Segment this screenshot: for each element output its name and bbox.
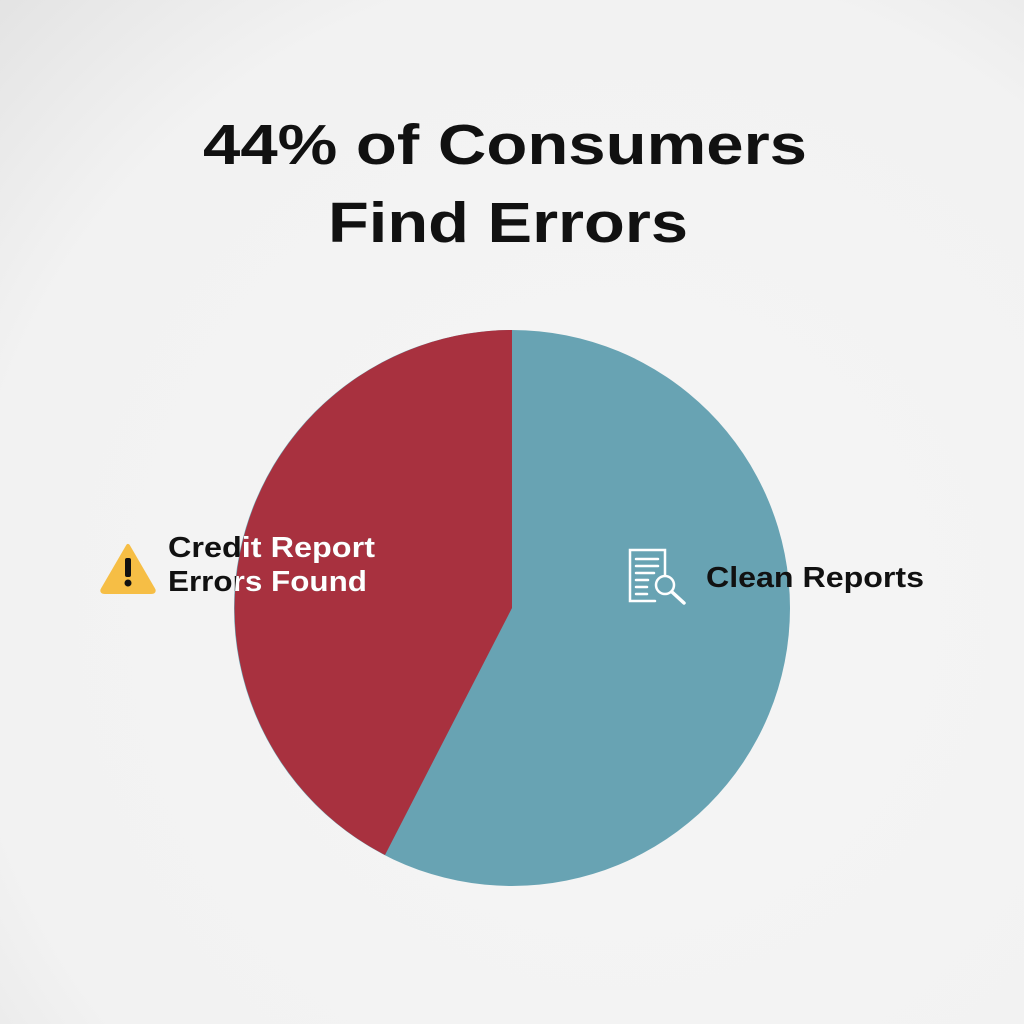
icon: warning — [102, 546, 154, 592]
title: 44% of Consumers — [203, 113, 807, 177]
label: clean reports: Clean Reports — [706, 562, 924, 594]
title: Find Errors — [328, 191, 688, 255]
slice: clean reports — [234, 330, 790, 886]
title — [203, 113, 807, 255]
label: errors found: Credit Report — [168, 532, 375, 564]
label: errors found: Errors Found — [168, 566, 367, 598]
pie chart — [234, 330, 790, 886]
label: errors found — [169, 536, 375, 592]
slice: errors found — [235, 330, 512, 855]
icon: document search — [630, 550, 684, 603]
label: errors found: Errors Found — [168, 566, 367, 598]
label: errors found: Credit Report — [168, 532, 375, 564]
